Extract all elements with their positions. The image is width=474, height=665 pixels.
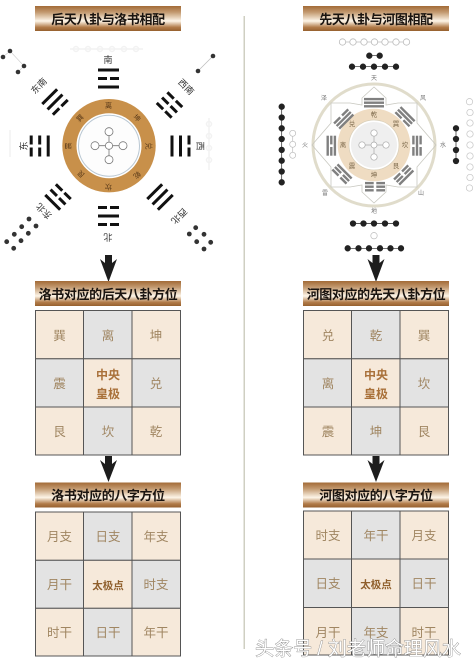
grid labels: 日支 [95,530,121,544]
grid labels: 太极点 [92,579,124,592]
panel: Luoshu bazi grid [35,482,181,656]
arrow: right top [368,255,384,282]
trigram: east 震 [30,136,50,156]
grid labels: 年支 [363,626,389,640]
grid labels: 艮 [418,425,431,439]
grid labels: 巽 [418,329,430,343]
grid labels: 太极点 [360,578,392,591]
grid labels: 日干 [411,577,437,591]
panel: Luoshu later heaven grid [35,281,181,455]
panel: later heaven bagua with Luoshu [1,6,215,251]
grid labels: 年干 [363,529,389,543]
direction labels: 东南 [28,75,49,96]
watermark: 头条号 / 刘老师命理风水 [255,638,461,660]
trigram: 艮 [393,165,414,185]
center cross of circles [359,130,389,160]
dots: right [453,98,473,191]
trigram: south 离 [98,68,119,88]
grid labels: 月支 [411,529,437,543]
direction labels: 东 [18,141,29,151]
title: 后天八卦与洛书相配: 后天八卦与洛书相配 [51,12,165,27]
trigram: 坎 [412,136,422,156]
grid labels: 坎 [102,425,115,439]
grid labels: 皇极 [96,386,120,401]
grid labels: 皇极 [364,386,388,401]
vertical divider [244,16,245,649]
panel: Hetu earlier heaven grid [303,281,449,455]
trigram: 震 [332,164,352,184]
grid labels: 离 [322,376,334,391]
dots: top white chain [339,39,410,45]
direction labels: 北 [103,232,113,242]
panel: Hetu bazi grid [303,482,449,655]
arrow: left top [100,255,117,282]
trigram: 坤 [365,182,385,192]
grid labels: 时支 [315,529,341,543]
grid labels: 乾 [150,425,163,439]
grid labels: 时支 [143,578,169,592]
direction labels: 东北 [33,201,54,222]
trigram: 乾 [364,98,384,108]
heading: 河图对应的八字方位 [319,488,433,503]
outer element labels: 地 [371,207,377,215]
ring with trigram names: 乾 [371,110,378,118]
trigram: northwest 乾 [146,183,174,211]
dots: left [279,104,296,185]
grid cells [304,511,448,655]
ring with trigram names: 坎 [402,140,409,149]
grid labels: 月干 [47,578,72,592]
grid labels: 年干 [143,626,169,640]
grid labels: 时干 [47,626,72,640]
trigram: northeast 艮 [44,183,72,211]
heading: 洛书对应的八字方位 [51,488,165,503]
grid labels: 兑 [322,329,334,343]
grid labels: 坎 [418,377,431,391]
trigram: 离 [326,136,336,156]
title: 先天八卦与河图相配: 先天八卦与河图相配 [319,12,433,27]
grid labels: 坤 [370,424,382,439]
heading: 洛书对应的后天八卦方位 [39,287,178,302]
direction labels: 西 [195,141,205,151]
ring with trigram names: 震 [64,142,72,150]
grid cells [36,512,180,656]
trigram: 兑 [333,109,354,129]
outer element labels: 天 [371,75,377,82]
grid labels: 乾 [370,329,383,343]
grid labels: 日支 [315,577,341,591]
grid labels [53,328,163,439]
direction labels: 南 [103,54,113,65]
ring with trigram names: 坎 [105,182,112,192]
ring with trigram names: 艮 [393,162,400,170]
grid labels: 中央 [364,367,388,382]
faint chain decorations [10,46,212,170]
title: 先天八卦与河图相配 [303,6,449,31]
trigram: 巽 [395,106,415,127]
ring with trigram names: 乾 [131,169,143,181]
outer element labels: 雷 [322,190,328,197]
ring with trigram names: 兑 [144,142,154,150]
trigram: west 兑 [170,136,190,156]
dots: bottom [345,221,404,251]
ring with trigram names: 兑 [349,119,356,128]
outer element labels [302,75,446,215]
direction labels: 西北 [169,206,189,226]
grid cells [36,310,180,455]
ring with trigram names: 离 [105,101,112,110]
dots: upper right [196,54,215,73]
heading [35,281,181,306]
heading [35,482,181,508]
title: 后天八卦与洛书相配 [35,6,181,31]
ring with trigram names: 离 [340,140,347,149]
outer element labels: 山 [418,189,424,197]
direction labels: 西南 [176,76,197,97]
outer element labels: 风 [420,95,426,102]
outer ring and star [312,84,436,206]
dots: top black [349,53,399,70]
grid labels: 坤 [150,328,162,343]
grid labels: 兑 [150,377,162,391]
ring with trigram names: 巽 [393,120,400,128]
grid labels: 日干 [95,626,121,640]
grid labels: 巽 [53,329,66,343]
heading: 河图对应的先天八卦方位 [307,287,446,302]
grid labels: 月干 [315,626,341,640]
arrow: right middle [368,456,384,482]
center cross of circles [91,128,127,164]
grid labels: 月支 [47,530,72,544]
grid labels [315,529,437,640]
trigram: southwest 坤 [156,91,183,119]
grid labels: 震 [53,377,66,391]
ring with trigram names: 坤 [131,112,143,124]
panel: earlier heaven bagua with Hetu [279,6,473,251]
trigram: north 坎 [98,206,119,226]
direction labels [18,54,205,242]
ring with trigram names: 巽 [75,113,86,124]
ring with trigram names: 艮 [76,168,87,179]
arrow: left middle [100,456,117,482]
heading [303,281,449,306]
outer element labels: 火 [302,142,308,149]
grid labels: 时干 [411,626,437,640]
dots: lower right [187,225,213,251]
grid labels [47,530,169,640]
grid labels: 年支 [143,530,169,544]
outer element labels: 泽 [321,94,327,102]
ring with trigram names: 震 [349,162,356,170]
grid labels [322,329,431,439]
dots: lower left [4,217,38,251]
trigram: southeast 巽 [41,88,69,116]
outer element labels: 水 [440,141,446,149]
grid labels: 中央 [96,367,120,382]
grid labels: 艮 [53,425,66,439]
ring with trigram names: 坤 [371,170,377,179]
ring with trigram names [338,109,410,181]
dots: upper left [1,49,26,74]
ring with trigram names [62,99,156,192]
grid labels: 震 [322,425,335,439]
grid cells [304,310,448,455]
grid labels: 离 [102,328,114,343]
heading [303,482,449,508]
